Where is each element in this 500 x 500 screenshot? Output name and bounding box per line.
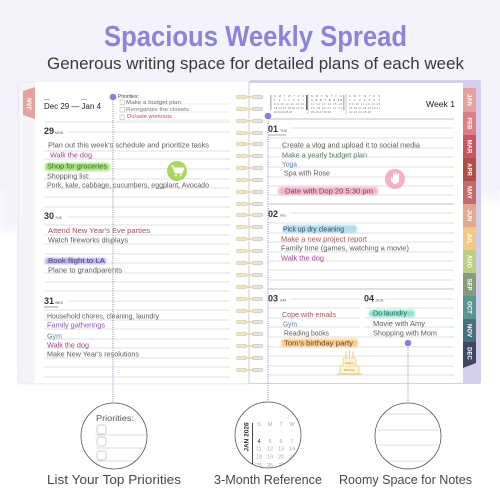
callout: calendar detail: 21 [289,454,295,460]
callout: calendar detail: 7 [290,439,294,445]
mini calendars: 1 2 3 4 5 6 7 [349,98,380,102]
connector: notes [405,340,411,403]
month tabs: NOV [466,324,472,337]
planner spread [18,80,481,384]
day: 30 Tue: TUE [55,216,63,220]
left tab: JAN [23,87,35,119]
callout: priorities detail: Priorities: [96,414,134,423]
icon: shopping cart [167,161,187,181]
callout: calendar detail: 14 [289,446,295,452]
day: 02 Fri: Walk the dog [281,254,324,262]
day: 03 Sat: Reading books [284,328,329,338]
day: 31 Wed: Family gatherings [47,320,105,330]
callout: calendar detail: S [257,422,261,428]
day: 29 Mon: MON [55,131,64,135]
day: 01 Thu: THU [280,129,288,133]
day: 02 Fri: Family time (games, watching a movie) [281,244,409,252]
day: 04 Sun: Shopping with Mom [373,328,437,338]
week label: Week 1 [426,99,455,109]
day: 31 Wed: Walk the dog [47,340,89,350]
callout: calendar detail: 20 [278,454,284,460]
day: 03 Sat [268,294,353,348]
panel: left cover [18,82,250,384]
callout: calendar detail: 19 [267,454,273,460]
left tab: JAN: JAN [28,98,34,110]
month tabs: OCT [466,301,472,314]
label: priorities: List Your Top Priorities [47,473,181,487]
day: 03 Sat: Cope with emails [282,310,336,319]
day: 29 Mon: Shopping list: [47,172,90,180]
day: 31 Wed: 31 [44,296,54,306]
day: 04 Sun: Do laundry [373,308,407,318]
icon: pink hand [385,169,405,189]
month tabs: AUG [466,255,472,268]
callout: calendar detail: T [279,422,283,428]
day: 01 Thu: Spa with Rose [284,168,330,178]
label: reference: 3-Month Reference [214,473,322,487]
priorities box: Make a budget plan [126,100,181,106]
callout: calendar detail: 25 [256,463,262,469]
week header left: Dec 29 — Jan 4 [44,102,102,111]
callout: calendar detail: 27 [278,463,284,469]
month tabs: MAY [466,186,472,199]
callout: priorities detail [81,403,147,469]
callout: calendar detail: 13 [278,446,284,452]
connector: calendar [265,113,271,402]
day: 02 Fri: Make a new project report [281,234,367,244]
day: 04 Sun [364,294,437,338]
mini calendars: 1 2 3 4 5 6 7 [274,98,304,102]
day: 30 Tue [44,211,150,274]
callout: calendar detail: M [268,422,273,428]
mini calendars: 8 9 10 11 12 13 14 [349,102,380,106]
mini calendars: S M T W T F S [274,94,304,98]
mini calendars: 4 5 6 7 8 9 10 [311,98,342,102]
day: 04 Sun: 04 [364,294,374,304]
callout: calendar detail: · [280,429,282,435]
day: 03 Sat: 03 [268,294,278,304]
mini calendars: 15 16 17 18 19 20 21 [349,106,380,110]
day: 01 Thu: 01 [268,124,278,134]
callout: calendar detail: 6 [279,439,283,445]
day: 30 Tue: Attend New Year's Eve parties [48,226,150,235]
callout: calendar detail [235,402,301,469]
day: 03 Sat: Tom's birthday party [284,338,353,348]
icon: birthday cake [337,350,362,374]
callout: calendar detail: · [291,429,293,435]
subtitle: Generous writing space for detailed plans of each week [47,54,464,73]
day: 29 Mon [44,126,209,190]
day: 02 Fri: Pick up dry cleaning [283,224,344,234]
callout: calendar detail: 26 [267,463,273,469]
month tabs: JUL [466,233,472,244]
day: 30 Tue: Watch fireworks displays [48,236,128,244]
callout: calendar detail: 12 [267,446,273,452]
day: 31 Wed: WED [55,301,64,305]
month tabs [463,88,476,368]
priorities box [118,94,189,120]
spiral binding [236,95,263,372]
mini calendars: 22 23 24 25 26 [349,110,371,114]
day: 29 Mon: Shop for groceries [47,162,107,170]
day: 03 Sat: Gym [283,320,297,328]
callout: calendar detail: 18 [256,454,262,460]
mini calendars: 8 9 10 11 12 13 14 [274,102,304,106]
callout: calendar detail: W [289,422,295,428]
mini calendars: S M T W T F S [349,94,380,98]
mini calendars: 18 19 20 21 22 23 [311,106,342,110]
month tabs: APR [466,163,472,176]
month tabs: MAR [466,140,472,154]
icon: birthday cake: Happy [345,361,354,365]
callout: calendar detail: 11 [256,446,262,452]
day: 01 Thu: Create a vlog and upload it to social media [282,140,420,150]
month tabs: JAN [466,94,472,106]
callout: calendar detail: JAN 2026 [244,422,250,452]
day: 29 Mon: 29 [44,126,54,136]
day: 29 Mon: Walk the dog [50,150,92,160]
icon: birthday cake: Birthday [344,368,355,372]
callout: notes detail [375,403,441,469]
connector: priorities [110,94,116,403]
day: 31 Wed [44,296,159,358]
day: 02 Fri: FRI [280,214,286,218]
callout: calendar detail: 4 [257,439,261,445]
mini calendars: S M T W T F S [311,94,342,98]
priorities box: Reorganize the closets [126,107,189,113]
day: 01 Thu: Make a yearly budget plan [282,150,367,160]
day: 01 Thu: Yoga [282,160,297,168]
callout: calendar detail: · [269,429,271,435]
day: 31 Wed: Household chores, cleaning, laundry [47,312,159,320]
day: 04 Sun: Movie with Amy [373,319,425,328]
day: 30 Tue: Book flight to LA [48,256,105,265]
day: 29 Mon: Plan out this week's schedule and prioritize tasks [48,140,209,150]
month tabs: SEP [466,278,472,291]
month tabs: FEB [466,118,472,130]
day: 29 Mon: Pork, kale, cabbage, cucumbers, eggplant, Avocado [47,180,209,190]
day: 02 Fri: 02 [268,209,278,219]
callout: calendar detail: · [258,429,260,435]
day: 30 Tue: Plane to grandparents [48,266,122,274]
priorities box: Priorities: [118,94,139,100]
callout: calendar detail: 5 [268,439,272,445]
month tabs: JUN [466,209,472,222]
label: notes: Roomy Space for Notes [339,473,472,487]
day: 02 Fri [268,209,409,262]
background wash [0,0,500,380]
day: 30 Tue: 30 [44,211,54,221]
mini calendars [270,94,380,114]
day: 31 Wed: Make New Year's resolutions [47,350,139,358]
mini calendars: 11 12 13 14 15 16 [311,102,342,106]
mini calendars: 15 16 17 18 19 20 21 [274,106,304,110]
day: 01 Thu: Date with Dop 20 5:30 pm [285,186,373,196]
day: 31 Wed: Gym [47,332,62,340]
highlights [45,163,415,347]
day: 01 Thu [268,124,420,196]
mini calendars: 25 26 27 28 29 [311,110,331,114]
day: 03 Sat: SAT [280,298,287,302]
day: 04 Sun: SUN [376,298,384,302]
month tabs: DEC [466,347,472,360]
panel: right cover [249,80,481,384]
title: Spacious Weekly Spread [104,21,407,53]
mini calendars: 22 23 24 25 26 [274,110,292,114]
priorities box: Do/sale workouts [127,114,172,120]
